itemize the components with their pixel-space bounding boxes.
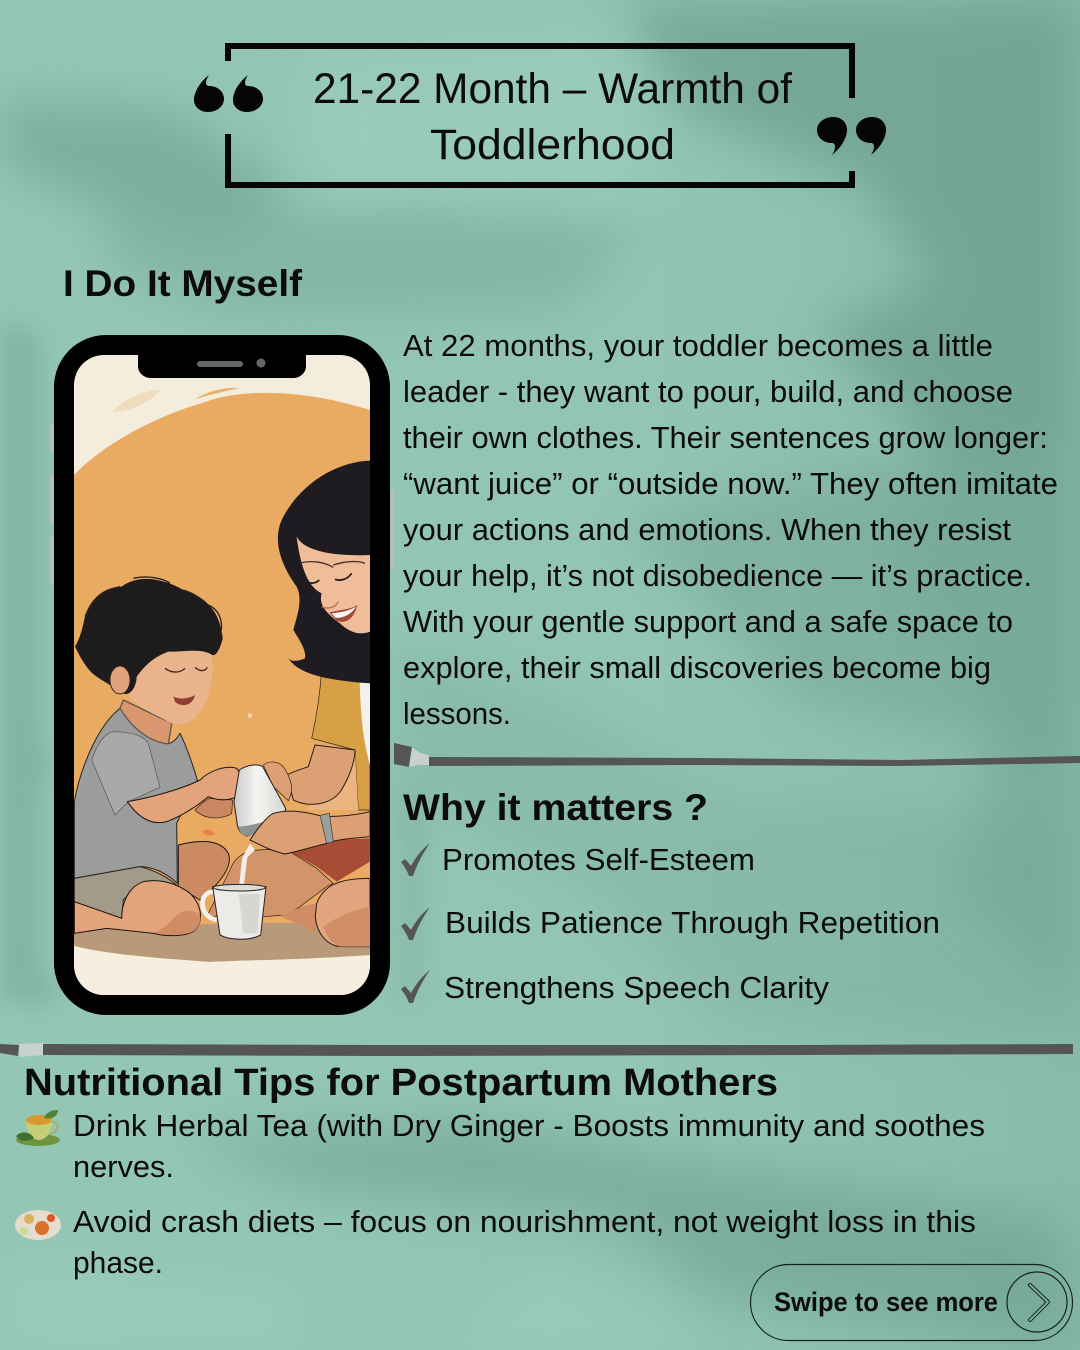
mug: [202, 892, 217, 920]
text: crash diet tip: [73, 1204, 976, 1280]
icon: herbal tea cup: [16, 1110, 60, 1146]
child front leg: [74, 881, 200, 936]
child rear leg: [178, 841, 229, 900]
phone side buttons: [50, 425, 394, 585]
phone notch: [138, 355, 306, 378]
body paragraph: [403, 328, 1058, 731]
body paragraph: explore, their small discoveries become big: [403, 650, 991, 685]
body paragraph: your actions and emotions. When they resist: [403, 512, 1011, 547]
milk stream: [239, 843, 255, 887]
title: 21-22 Month – Warmth of: [313, 65, 793, 113]
mother hair: [278, 461, 370, 683]
body paragraph: their own clothes. Their sentences grow longer:: [403, 420, 1048, 455]
checklist: [401, 842, 940, 1005]
text: crash diet tip: Avoid crash diets – focus on nourishment, not weight loss in this: [73, 1204, 976, 1239]
swipe button: Swipe to see more: [774, 1287, 998, 1317]
title frame: [225, 43, 855, 188]
heading: I Do It Myself: I Do It Myself: [63, 263, 303, 304]
child shorts: [74, 867, 177, 918]
child eyes and mouth: [165, 667, 207, 672]
mother legs and shorts: [207, 850, 333, 917]
jug: [234, 765, 286, 836]
icon: chevron arrow in circle: [1007, 1272, 1067, 1332]
swipe button: [750, 1264, 1072, 1340]
mother shirt and arm: [312, 670, 370, 810]
check item 1: Promotes Self-Esteem: [442, 842, 755, 877]
body paragraph: With your gentle support and a safe space to: [403, 604, 1013, 639]
divider: marker line lower: [0, 1043, 1073, 1057]
body paragraph: At 22 months, your toddler becomes a little: [403, 328, 993, 363]
illustration: mother and toddler pouring milk: [74, 355, 370, 995]
icon: opening quote marks: [194, 75, 263, 112]
phone speaker: [197, 361, 243, 367]
child ear: [110, 666, 130, 694]
heading: Why it matters: Why it matters ?: [403, 787, 708, 828]
child lower hand: [195, 798, 233, 818]
body paragraph: lessons.: [403, 696, 511, 731]
body paragraph: “want juice” or “outside now.” They often imitate: [403, 466, 1058, 501]
check item 3: Strengthens Speech Clarity: [444, 970, 830, 1005]
body paragraph: leader - they want to pour, build, and choose: [403, 374, 1013, 409]
text: herbal tea tip: Drink Herbal Tea (with Dry Ginger - Boosts immunity and soothes: [73, 1108, 985, 1143]
text: herbal tea tip: nerves.: [73, 1149, 174, 1184]
phone camera: [256, 358, 266, 368]
child face: [128, 649, 213, 724]
icon: food plate: [15, 1210, 61, 1240]
mother lower hand and bracelet: [250, 811, 370, 854]
icon: closing quote marks: [817, 117, 886, 155]
title: [313, 65, 793, 169]
phone body: [54, 335, 390, 1015]
text: herbal tea tip: [73, 1108, 985, 1184]
check item 2: Builds Patience Through Repetition: [445, 905, 940, 940]
text: crash diet tip: phase.: [73, 1245, 163, 1280]
mother face: [297, 537, 370, 633]
divider: marker line upper: [394, 743, 1080, 767]
body paragraph: your help, it’s not disobedience — it’s practice.: [403, 558, 1032, 593]
heading: Nutritional Tips: Nutritional Tips for Postpartum Mothers: [24, 1062, 778, 1104]
child hair: [75, 579, 223, 694]
child arm and hand: [127, 767, 242, 823]
child shirt: [74, 708, 197, 883]
title: Toddlerhood: [430, 121, 675, 169]
phone mockup with illustration: [50, 335, 394, 1015]
mother upper hand: [263, 762, 291, 801]
